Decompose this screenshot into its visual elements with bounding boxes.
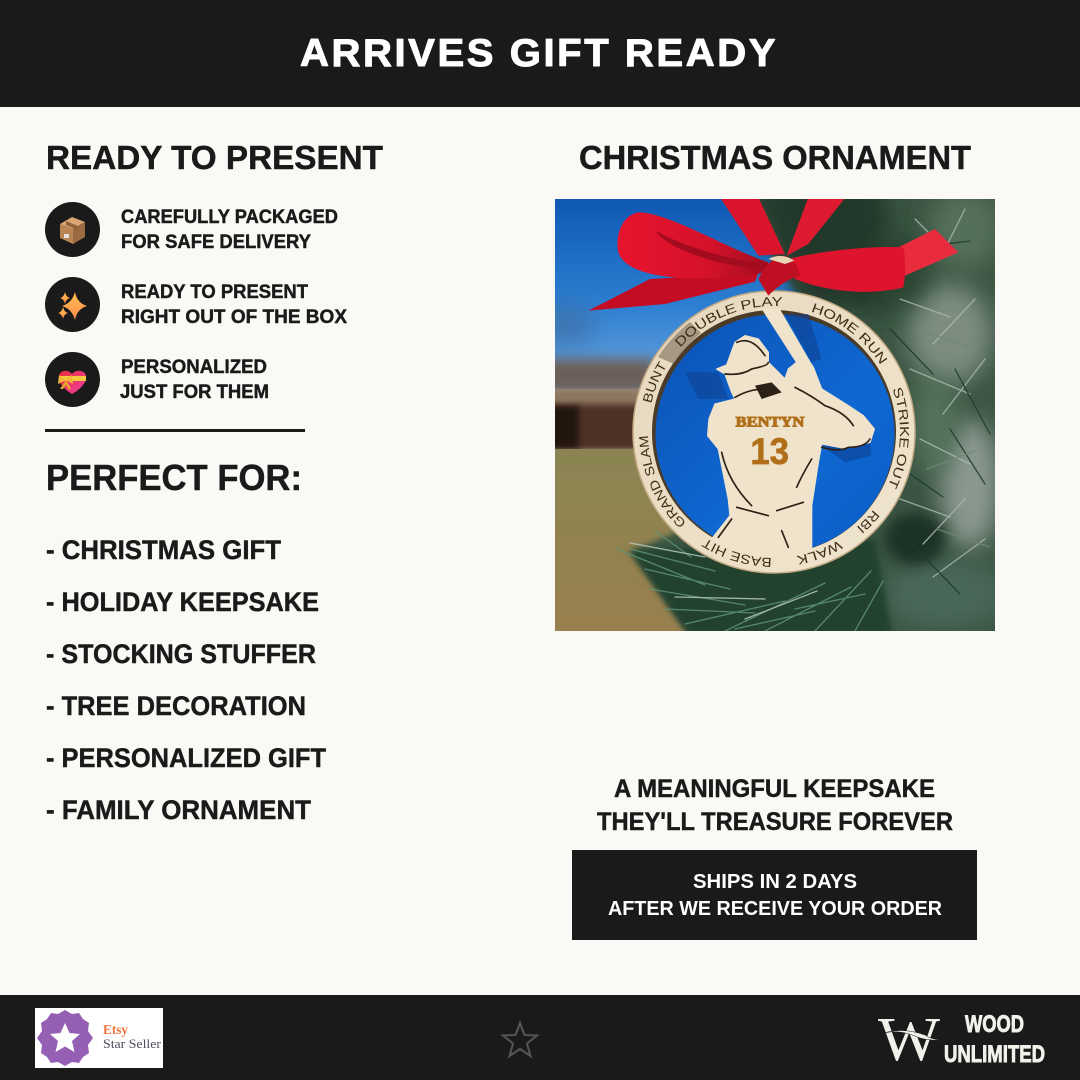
list of gift occasions: - PERSONALIZED GIFT (46, 743, 326, 773)
callout: shipping time: AFTER WE RECEIVE YOUR ORDER (608, 898, 943, 920)
list of gift occasions: - HOLIDAY KEEPSAKE (46, 587, 319, 617)
icon: sparkles (45, 277, 100, 332)
list of gift occasions (46, 535, 326, 825)
ring words: DOUBLE PLAY (674, 297, 782, 347)
heading: christmas ornament: CHRISTMAS ORNAMENT (579, 139, 971, 176)
badge: etsy star seller (35, 1008, 163, 1068)
text: personalized: JUST FOR THEM (120, 382, 269, 403)
callout: shipping time: SHIPS IN 2 DAYS (693, 871, 857, 893)
ring words: BUNT (642, 360, 665, 402)
text: ready to present: RIGHT OUT OF THE BOX (121, 307, 347, 328)
ring words: GRAND SLAM (639, 436, 684, 527)
heading: perfect for: PERFECT FOR: (46, 457, 302, 498)
ring words (639, 297, 909, 567)
tagline: A MEANINGFUL KEEPSAKE (614, 775, 935, 803)
jersey name and number (735, 416, 805, 465)
list of gift occasions: - STOCKING STUFFER (46, 639, 316, 669)
callout: shipping time (572, 850, 977, 940)
text: personalized: PERSONALIZED (121, 357, 267, 378)
logo: wood unlimited (878, 1006, 1045, 1074)
badge: etsy star seller: Etsy (103, 1023, 128, 1038)
ring words: RBI (857, 510, 880, 534)
text: carefully packaged: CAREFULLY PACKAGED (121, 207, 338, 228)
text: ready to present: READY TO PRESENT (121, 282, 308, 303)
photo: personalized baseball ornament on a tree (555, 199, 995, 631)
badge: etsy star seller: Star Seller (103, 1036, 162, 1051)
jersey name and number: 13 (750, 430, 789, 472)
ornament (632, 290, 916, 574)
title: ARRIVES GIFT READY (300, 32, 778, 75)
text: carefully packaged (121, 207, 338, 253)
list of gift occasions: - FAMILY ORNAMENT (46, 795, 311, 825)
tree foliage (616, 199, 995, 631)
text: personalized (120, 357, 269, 403)
tagline (597, 775, 953, 836)
text: carefully packaged: FOR SAFE DELIVERY (121, 232, 311, 253)
red ribbon (588, 197, 958, 311)
ring words: STRIKE OUT (890, 388, 909, 490)
icon: package (45, 202, 100, 257)
header banner (0, 0, 1080, 107)
text: ready to present (121, 282, 347, 328)
list of gift occasions: - CHRISTMAS GIFT (46, 535, 281, 565)
panel: ready to present (45, 139, 383, 407)
jersey name and number: BENTYN (736, 415, 805, 431)
list of gift occasions: - TREE DECORATION (46, 691, 306, 721)
tagline: THEY'LL TREASURE FOREVER (597, 808, 953, 836)
ring words: BASE HIT (702, 540, 771, 567)
panel: perfect for (46, 457, 326, 825)
footer bar (0, 995, 1080, 1080)
icon: center star (503, 1023, 537, 1056)
heading: ready to present: READY TO PRESENT (46, 139, 383, 176)
logo: wood unlimited: W (878, 1006, 940, 1074)
logo: wood unlimited: UNLIMITED (944, 1041, 1045, 1068)
batter silhouette (685, 299, 874, 566)
icon: gift heart (45, 352, 100, 407)
logo: wood unlimited: WOOD (965, 1011, 1024, 1038)
ring words: HOME RUN (812, 303, 888, 364)
ring words: WALK (796, 542, 844, 565)
